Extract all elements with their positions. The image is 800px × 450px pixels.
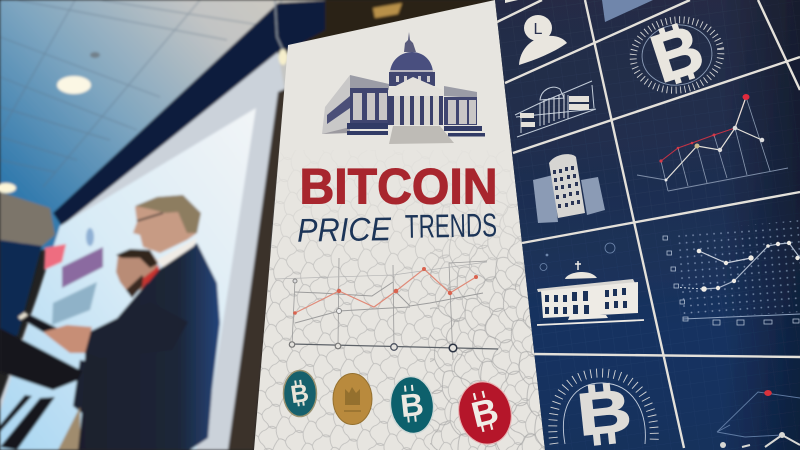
presenter head <box>133 195 200 253</box>
capitol pediment <box>388 77 443 96</box>
icon: litecoin person <box>519 15 567 65</box>
right navy icon wall <box>490 0 800 450</box>
subtitle: Price Trends: PRICE <box>297 210 392 249</box>
screen slide: text block <box>52 282 97 325</box>
icon: litecoin person: L <box>534 21 543 38</box>
chart gridlines <box>292 258 487 360</box>
banner panel <box>254 0 545 450</box>
presenter <box>43 195 220 450</box>
screen slide: pink block <box>44 244 66 270</box>
coin: teal large <box>388 374 436 436</box>
capitol dome <box>390 52 433 72</box>
phone in hand <box>18 312 57 332</box>
title: Bitcoin: BITCOIN <box>300 158 498 214</box>
presenter collar <box>157 238 197 267</box>
presenter tie <box>143 265 159 283</box>
banner cobble texture <box>255 171 545 450</box>
dark upper wall <box>280 0 505 55</box>
icon: bitcoin with rays bottom <box>553 373 654 449</box>
capitol left side wing <box>322 75 350 134</box>
icon: top left fragment <box>505 0 518 3</box>
chart: red and white line <box>637 94 788 191</box>
chart: dotted scatter <box>663 220 800 325</box>
icon: white capitol <box>537 261 644 325</box>
projection screen <box>0 108 256 450</box>
icon: bitcoin with rays top: B <box>642 10 712 98</box>
wall lamp glow <box>373 3 402 18</box>
pendant bulb and cable <box>275 0 288 65</box>
capitol building illustration <box>322 32 485 144</box>
capitol lantern <box>404 32 416 52</box>
coin: red: B <box>467 389 502 436</box>
screen frame <box>0 52 285 450</box>
presenter hand <box>43 325 92 353</box>
back curtain <box>0 240 42 340</box>
coin: red <box>452 376 518 450</box>
capitol colonnade <box>388 96 443 125</box>
wall below ceiling <box>0 192 55 246</box>
line chart <box>275 258 498 360</box>
capitol steps <box>389 126 454 144</box>
ceiling light <box>57 76 91 94</box>
presenter hair <box>135 195 201 233</box>
ceiling <box>0 0 335 250</box>
photo background: conference room <box>0 0 505 450</box>
coin: teal large: B <box>399 386 425 424</box>
chart axis <box>292 344 498 349</box>
banner <box>250 0 550 450</box>
background man <box>58 249 160 450</box>
presenter glasses <box>137 213 163 221</box>
lectern <box>0 328 82 450</box>
small ceiling lights <box>0 52 100 244</box>
panel divider lines <box>497 0 800 448</box>
top curtain <box>53 0 330 228</box>
chart grey series <box>295 282 483 306</box>
screen slide: purple block <box>62 247 103 288</box>
navy panel background <box>490 0 800 450</box>
presenter suit <box>78 243 220 450</box>
screen slide: circle <box>86 228 94 246</box>
decorative circles near capitol <box>540 243 615 270</box>
presenter sleeve <box>85 302 188 358</box>
icon: city tower <box>533 154 605 223</box>
icon: top bar fragment <box>602 0 653 22</box>
capitol drum <box>389 72 435 86</box>
brown pillar <box>228 88 287 450</box>
capitol right wing <box>444 86 477 98</box>
coin: teal small: B <box>289 379 311 409</box>
chart: bottom right network <box>717 390 800 448</box>
coin: gold <box>333 374 372 424</box>
coin: teal small <box>284 370 316 416</box>
subtitle: Price Trends <box>297 206 497 249</box>
icon: bitcoin with rays top <box>630 16 724 94</box>
icon: museum outline <box>515 81 596 137</box>
subtitle: Price Trends: TRENDS <box>405 206 497 245</box>
capitol left front wing <box>350 75 389 90</box>
chart red series <box>295 269 476 313</box>
icon: bitcoin with rays bottom: B <box>574 376 635 449</box>
